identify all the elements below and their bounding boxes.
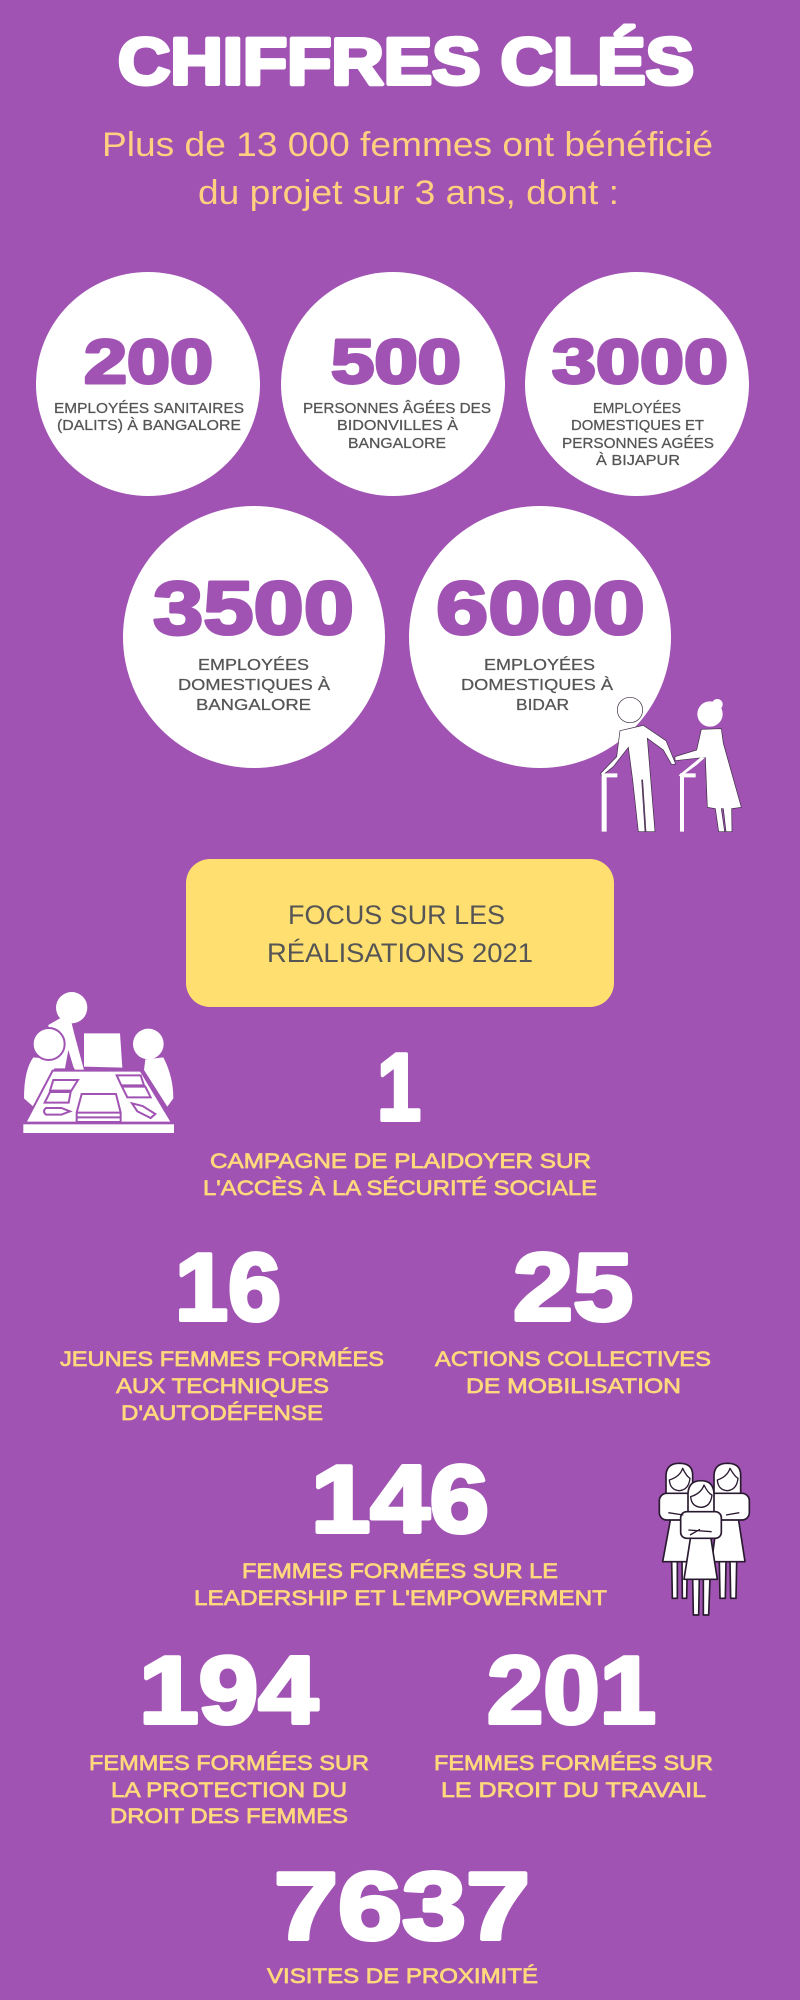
stat circle: 3000: EMPLOYÉES: [593, 400, 681, 417]
stat: 16 jeunes femmes: 16: [175, 1234, 281, 1341]
stat: 146 leadership: FEMMES FORMÉES SUR LE: [242, 1558, 558, 1583]
icon: team meeting around table: [23, 992, 174, 1133]
title: CHIFFRES CLÉS: [118, 24, 694, 98]
stat: 25 actions collectives: ACTIONS COLLECTIVES: [435, 1347, 711, 1371]
stat: 16 jeunes femmes: JEUNES FEMMES FORMÉES: [60, 1346, 384, 1371]
stat: 146 leadership: [194, 1446, 607, 1610]
stat circle: 3500: EMPLOYÉES: [198, 655, 309, 674]
stat circle: 3000: DOMESTIQUES ET: [571, 418, 704, 434]
stat circle: 3000: À BIJAPUR: [596, 452, 680, 469]
subtitle: [102, 126, 713, 212]
icon: group of three women: [659, 1463, 749, 1615]
stat circle: 500: [281, 272, 505, 496]
stat: 16 jeunes femmes: [60, 1234, 384, 1425]
callout: focus sur les réalisations 2021: FOCUS SUR LES: [288, 900, 505, 930]
stat circle: 500: 500: [331, 328, 461, 397]
stat circle: 6000: 6000: [436, 566, 645, 650]
stat: 7637 visites: [267, 1853, 538, 1988]
stat: 1 campagne: 1: [377, 1034, 421, 1141]
stat circle: 3000: PERSONNES AGÉES: [562, 435, 714, 452]
stat: 25 actions collectives: [435, 1234, 711, 1398]
stat circle: 200: EMPLOYÉES SANITAIRES: [54, 400, 244, 417]
icon: elderly couple with walkers: [601, 697, 741, 832]
stat: 7637 visites: VISITES DE PROXIMITÉ: [267, 1963, 538, 1988]
stat circle: 3500: BANGALORE: [196, 697, 311, 714]
stat circle: 500: BIDONVILLES À: [337, 417, 458, 434]
callout: focus sur les réalisations 2021: RÉALISATIONS 2021: [267, 938, 533, 968]
stat: 201 droit du travail: [434, 1637, 713, 1802]
stat: 194 droit des femmes: [89, 1637, 369, 1828]
stat: 194 droit des femmes: FEMMES FORMÉES SUR: [89, 1750, 369, 1775]
stat circle: 6000: DOMESTIQUES À: [461, 675, 613, 694]
stat: 16 jeunes femmes: AUX TECHNIQUES: [116, 1374, 329, 1398]
stat circle: 6000: [409, 506, 671, 768]
callout: focus sur les réalisations 2021: [186, 859, 614, 1007]
stat: 194 droit des femmes: LA PROTECTION DU: [111, 1778, 347, 1802]
stat circle: 6000: EMPLOYÉES: [484, 655, 595, 674]
stat circle: 3500: [123, 506, 385, 768]
subtitle: Plus de 13 000 femmes ont bénéficié: [102, 126, 713, 164]
stat circle: 3500: DOMESTIQUES À: [178, 675, 330, 694]
stat: 16 jeunes femmes: D'AUTODÉFENSE: [121, 1400, 323, 1425]
stat: 194 droit des femmes: DROIT DES FEMMES: [110, 1804, 348, 1828]
stat: 194 droit des femmes: 194: [139, 1637, 318, 1744]
stat circle: 200: (DALITS) À BANGALORE: [57, 417, 241, 434]
stat circle: 200: [36, 272, 260, 496]
stat: 201 droit du travail: 201: [487, 1637, 656, 1744]
stat: 25 actions collectives: 25: [513, 1234, 633, 1341]
stat circle: 200: 200: [84, 328, 213, 397]
stat circle: 500: BANGALORE: [348, 436, 446, 452]
stat: 1 campagne: CAMPAGNE DE PLAIDOYER SUR: [210, 1149, 591, 1173]
stat: 1 campagne: L'ACCÈS À LA SÉCURITÉ SOCIALE: [203, 1175, 597, 1200]
stat circle: 3000: [525, 272, 749, 496]
subtitle: du projet sur 3 ans, dont :: [198, 174, 619, 212]
stat: 1 campagne: [203, 1034, 597, 1200]
stat: 146 leadership: 146: [311, 1446, 489, 1553]
stat: 25 actions collectives: DE MOBILISATION: [466, 1374, 681, 1398]
stat: 201 droit du travail: LE DROIT DU TRAVAIL: [441, 1778, 706, 1802]
stat: 146 leadership: LEADERSHIP ET L'EMPOWERMENT: [194, 1586, 607, 1610]
stat circle: 3500: 3500: [153, 566, 354, 650]
stat circle: 3000: 3000: [552, 328, 728, 397]
stat circle: 6000: BIDAR: [516, 697, 569, 714]
stat circle: 500: PERSONNES ÂGÉES DES: [303, 400, 491, 417]
stat: 201 droit du travail: FEMMES FORMÉES SUR: [434, 1750, 713, 1775]
stat: 7637 visites: 7637: [274, 1853, 530, 1960]
